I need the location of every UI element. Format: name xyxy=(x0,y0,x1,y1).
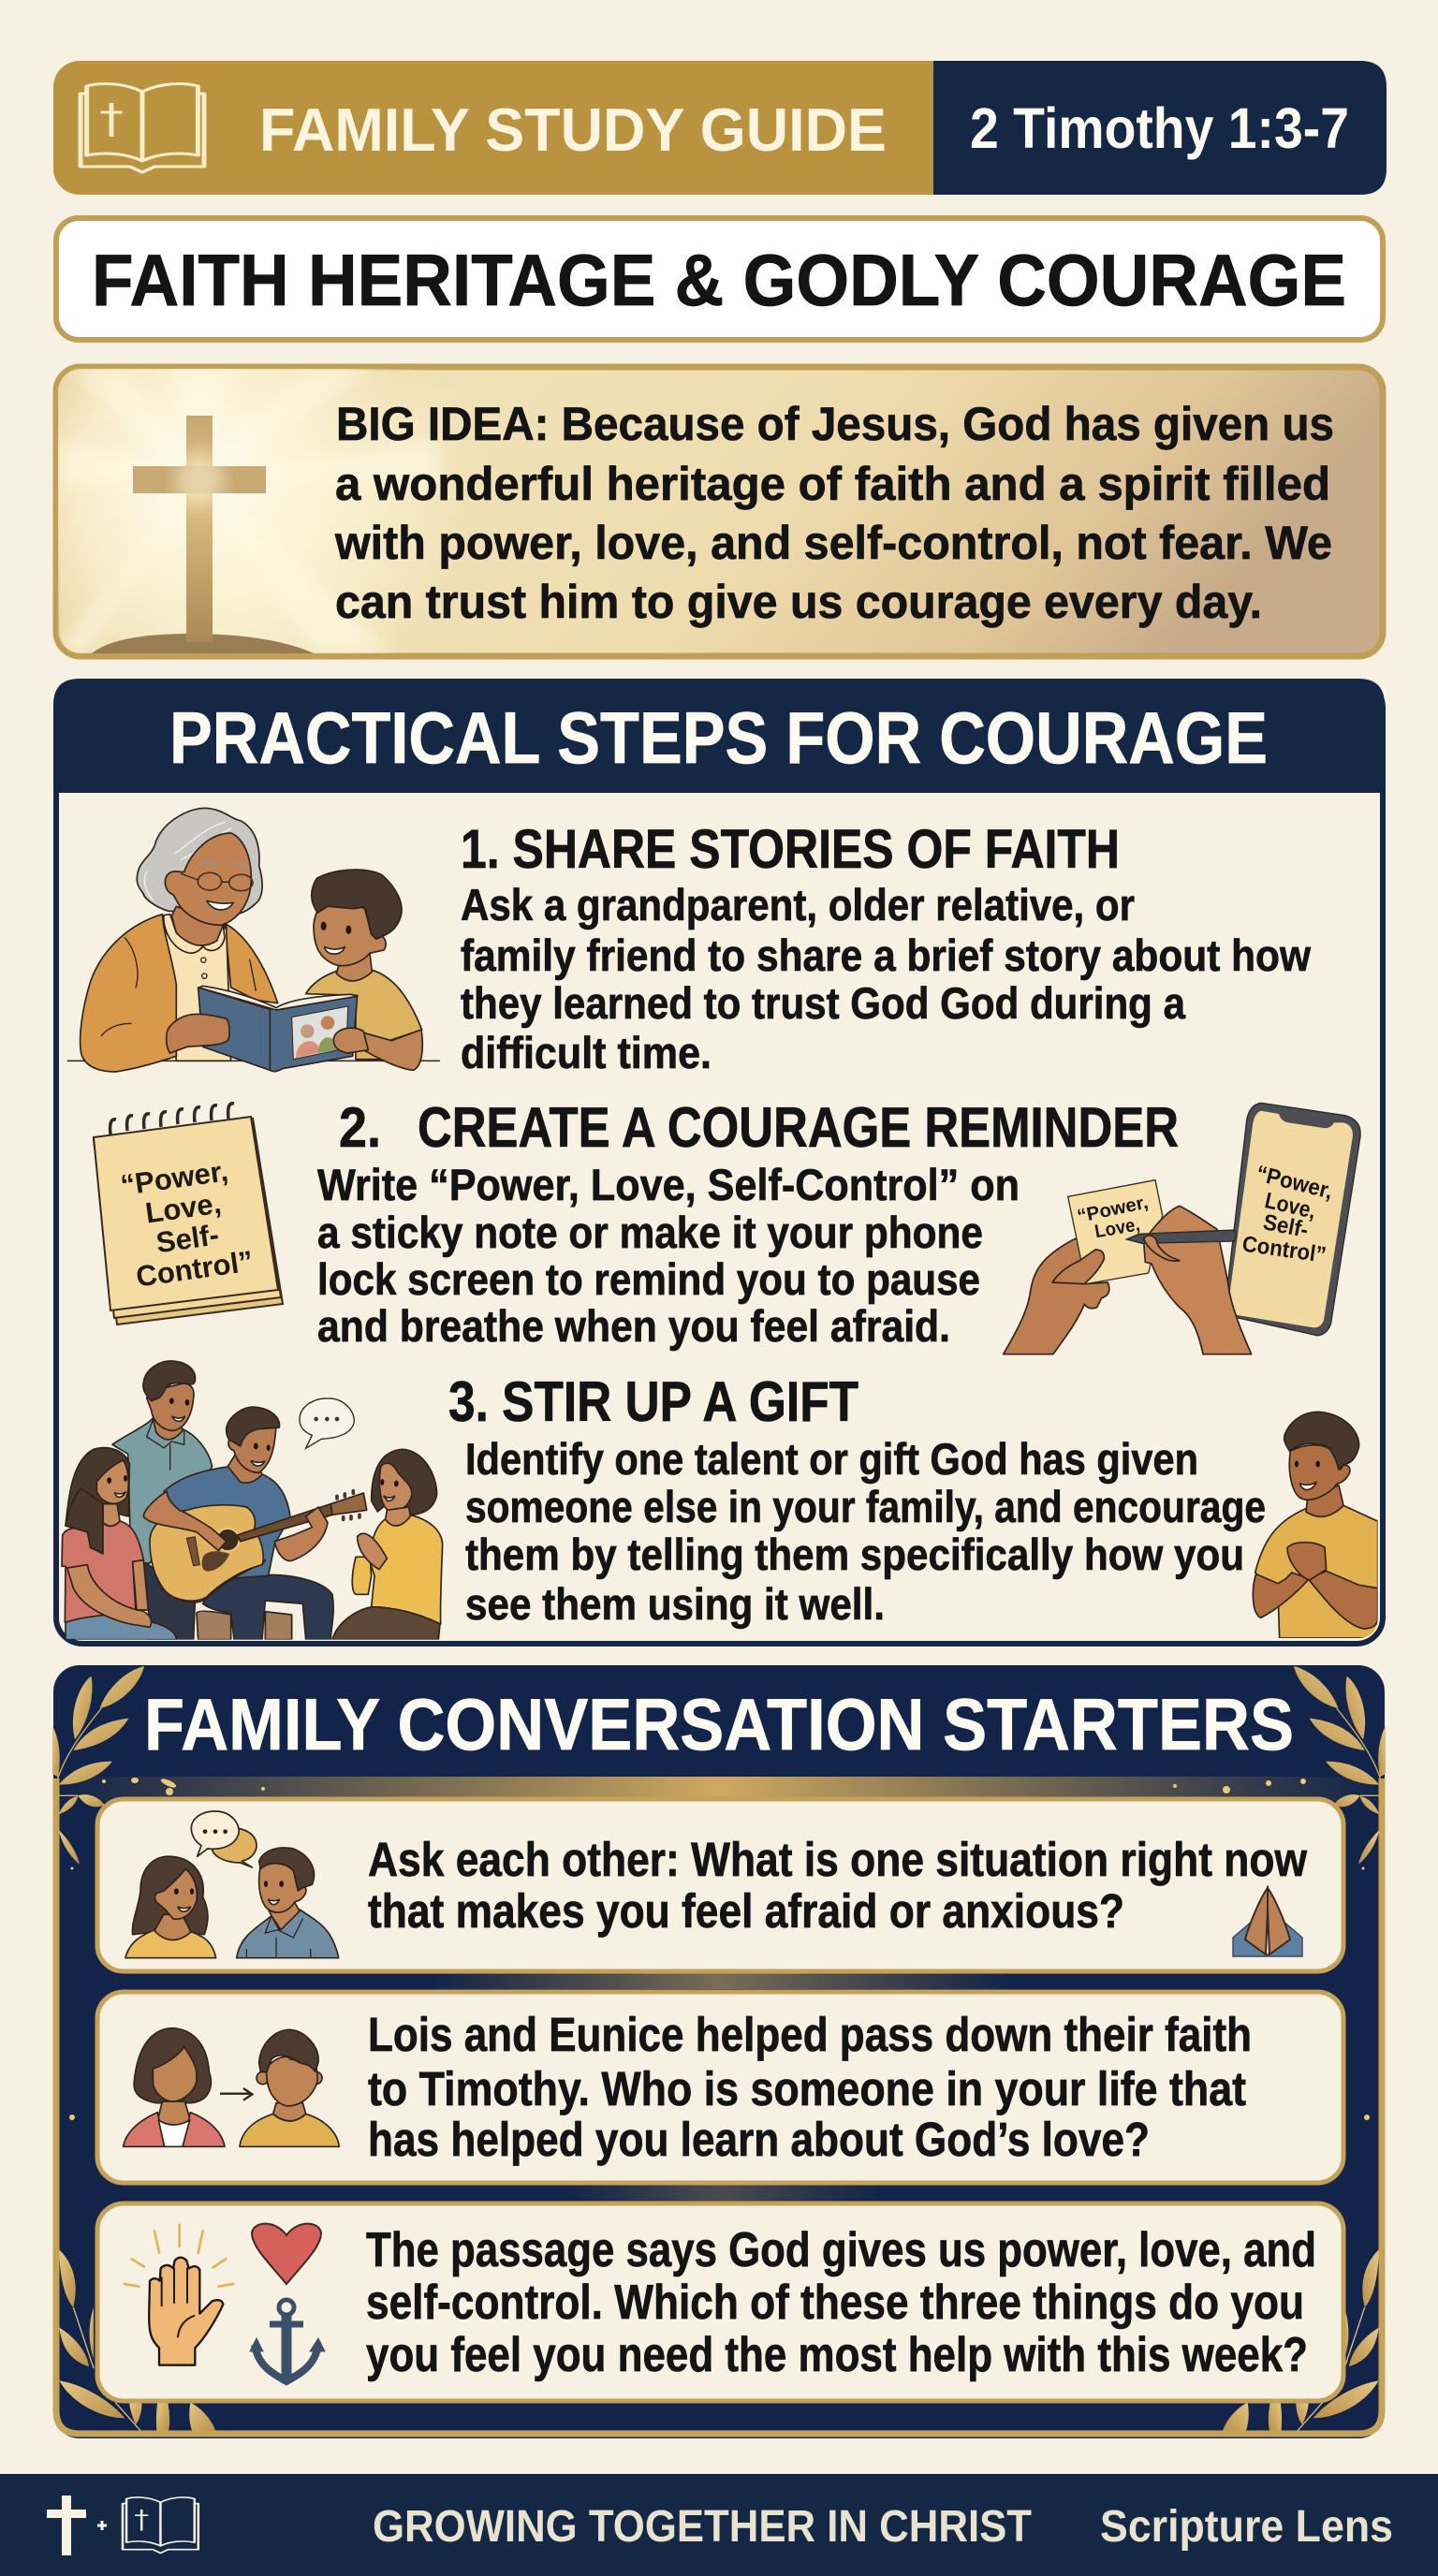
main title box xyxy=(56,218,1383,340)
section heading: PRACTICAL STEPS FOR COURAGE xyxy=(169,696,1268,779)
main title box: FAITH HERITAGE & GODLY COURAGE xyxy=(92,239,1346,321)
header banner xyxy=(53,61,1387,195)
card 2 text: has helped you learn about God’s love? xyxy=(368,2113,1150,2166)
icon: heart xyxy=(252,2224,321,2284)
step 1 text xyxy=(461,880,1311,1077)
icon: open book with cross xyxy=(81,84,204,172)
big idea text: with power, love, and self-control, not fear. We xyxy=(334,517,1332,569)
left hand holding note xyxy=(1004,1238,1109,1354)
card 1 text: Ask each other: What is one situation right now xyxy=(368,1833,1307,1886)
phone: Self- xyxy=(1261,1209,1311,1243)
step 1 text: they learned to trust God God during a xyxy=(461,978,1186,1028)
card 1 text: that makes you feel afraid or anxious? xyxy=(368,1884,1124,1938)
step 1 text: Ask a grandparent, older relative, or xyxy=(461,880,1135,929)
icon: raised hand xyxy=(125,2225,233,2365)
icon: spiral notebook: Love, xyxy=(143,1187,223,1230)
card 2 text xyxy=(368,2008,1252,2166)
step 2 text: lock screen to remind you to pause xyxy=(317,1254,980,1304)
section heading: FAMILY CONVERSATION STARTERS xyxy=(144,1683,1294,1765)
phone xyxy=(1228,1103,1360,1336)
step 2 xyxy=(94,1096,1360,1354)
card 3 text: self-control. Which of these three things do you xyxy=(366,2276,1304,2330)
step 3 text: see them using it well. xyxy=(465,1579,885,1629)
panel: practical steps for courage xyxy=(53,679,1385,1644)
footer bar xyxy=(0,2474,1438,2576)
big idea text: a wonderful heritage of faith and a spirit filled xyxy=(335,458,1330,510)
icon: two people talking xyxy=(125,1811,339,1958)
phone: Love, xyxy=(1262,1188,1318,1224)
step 2 text: and breathe when you feel afraid. xyxy=(317,1301,950,1351)
panel: big idea xyxy=(56,367,1383,656)
illustration: smiling boy with hands clasped xyxy=(1253,1412,1378,1638)
sticky note: “Power, xyxy=(1076,1193,1150,1227)
gold glow band xyxy=(59,1777,1379,1801)
icon: spiral notebook xyxy=(94,1104,283,1325)
illustration: phone lock screen and hands writing on sticky note xyxy=(1004,1103,1360,1354)
step 3 text: Identify one talent or gift God has given xyxy=(465,1434,1198,1484)
illustration: family with guitar xyxy=(62,1361,443,1640)
icon: spiral notebook: “Power, xyxy=(119,1154,230,1202)
step 1 heading: 1. SHARE STORIES OF FAITH xyxy=(461,819,1120,880)
icon: anchor xyxy=(250,2300,325,2381)
phone: Control” xyxy=(1240,1232,1328,1268)
illustration: glowing cross on a hill xyxy=(58,369,449,653)
gold laurel leaves, top corners xyxy=(52,1666,1386,1865)
gold laurel leaves, bottom corners xyxy=(59,2249,1379,2431)
icon: spiral notebook: Control” xyxy=(134,1244,256,1294)
card 1 text xyxy=(368,1833,1307,1938)
step 1 text: difficult time. xyxy=(461,1028,712,1077)
speech bubble xyxy=(300,1398,354,1448)
icon: spiral notebook: Self- xyxy=(154,1218,221,1259)
footer tagline: GROWING TOGETHER IN CHRIST xyxy=(373,2502,1032,2552)
step 2 heading: CREATE A COURAGE REMINDER xyxy=(418,1096,1179,1159)
conversation card 2 xyxy=(97,1992,1343,2183)
icon: cross plus book xyxy=(47,2496,198,2555)
step 2 text: Write “Power, Love, Self-Control” on xyxy=(317,1160,1020,1209)
phone: “Power, xyxy=(1254,1161,1335,1205)
step 2 heading: 2. xyxy=(339,1096,381,1159)
conversation card 3 xyxy=(97,2203,1343,2401)
illustration: grandmother reading with child xyxy=(67,808,440,1072)
icon: passing faith from mentor to child xyxy=(124,2028,339,2146)
scripture reference: 2 Timothy 1:3-7 xyxy=(970,96,1349,160)
sticky note xyxy=(1068,1180,1163,1284)
big idea text: BIG IDEA: Because of Jesus, God has given us xyxy=(336,398,1334,450)
gold sparkles xyxy=(69,1777,1370,2120)
step 3 heading: 3. STIR UP A GIFT xyxy=(448,1370,858,1433)
header title: FAMILY STUDY GUIDE xyxy=(259,95,887,164)
step 3 text xyxy=(465,1434,1266,1629)
panel: family conversation starters xyxy=(52,1665,1386,2438)
big idea text: can trust him to give us courage every day. xyxy=(335,576,1262,628)
card 3 text xyxy=(366,2223,1316,2382)
writing hand with pen xyxy=(1126,1206,1252,1354)
conversation card 1 xyxy=(97,1799,1343,1971)
step 2 text: a sticky note or make it your phone xyxy=(317,1208,983,1257)
step 1 text: family friend to share a brief story about how xyxy=(461,930,1311,980)
step 3 text: them by telling them specifically how you xyxy=(465,1530,1244,1579)
step 3 xyxy=(62,1361,1378,1640)
icon: praying hands xyxy=(1233,1888,1302,1956)
step 3 text: someone else in your family, and encourage xyxy=(465,1482,1266,1531)
big idea text xyxy=(334,398,1334,628)
card 2 text: Lois and Eunice helped pass down their faith xyxy=(368,2008,1252,2061)
brand name: Scripture Lens xyxy=(1100,2502,1393,2552)
card 2 text: to Timothy. Who is someone in your life that xyxy=(368,2062,1246,2115)
step 2 text xyxy=(317,1160,1020,1351)
step 1 xyxy=(67,808,1311,1077)
sticky note: Love, xyxy=(1093,1214,1141,1242)
